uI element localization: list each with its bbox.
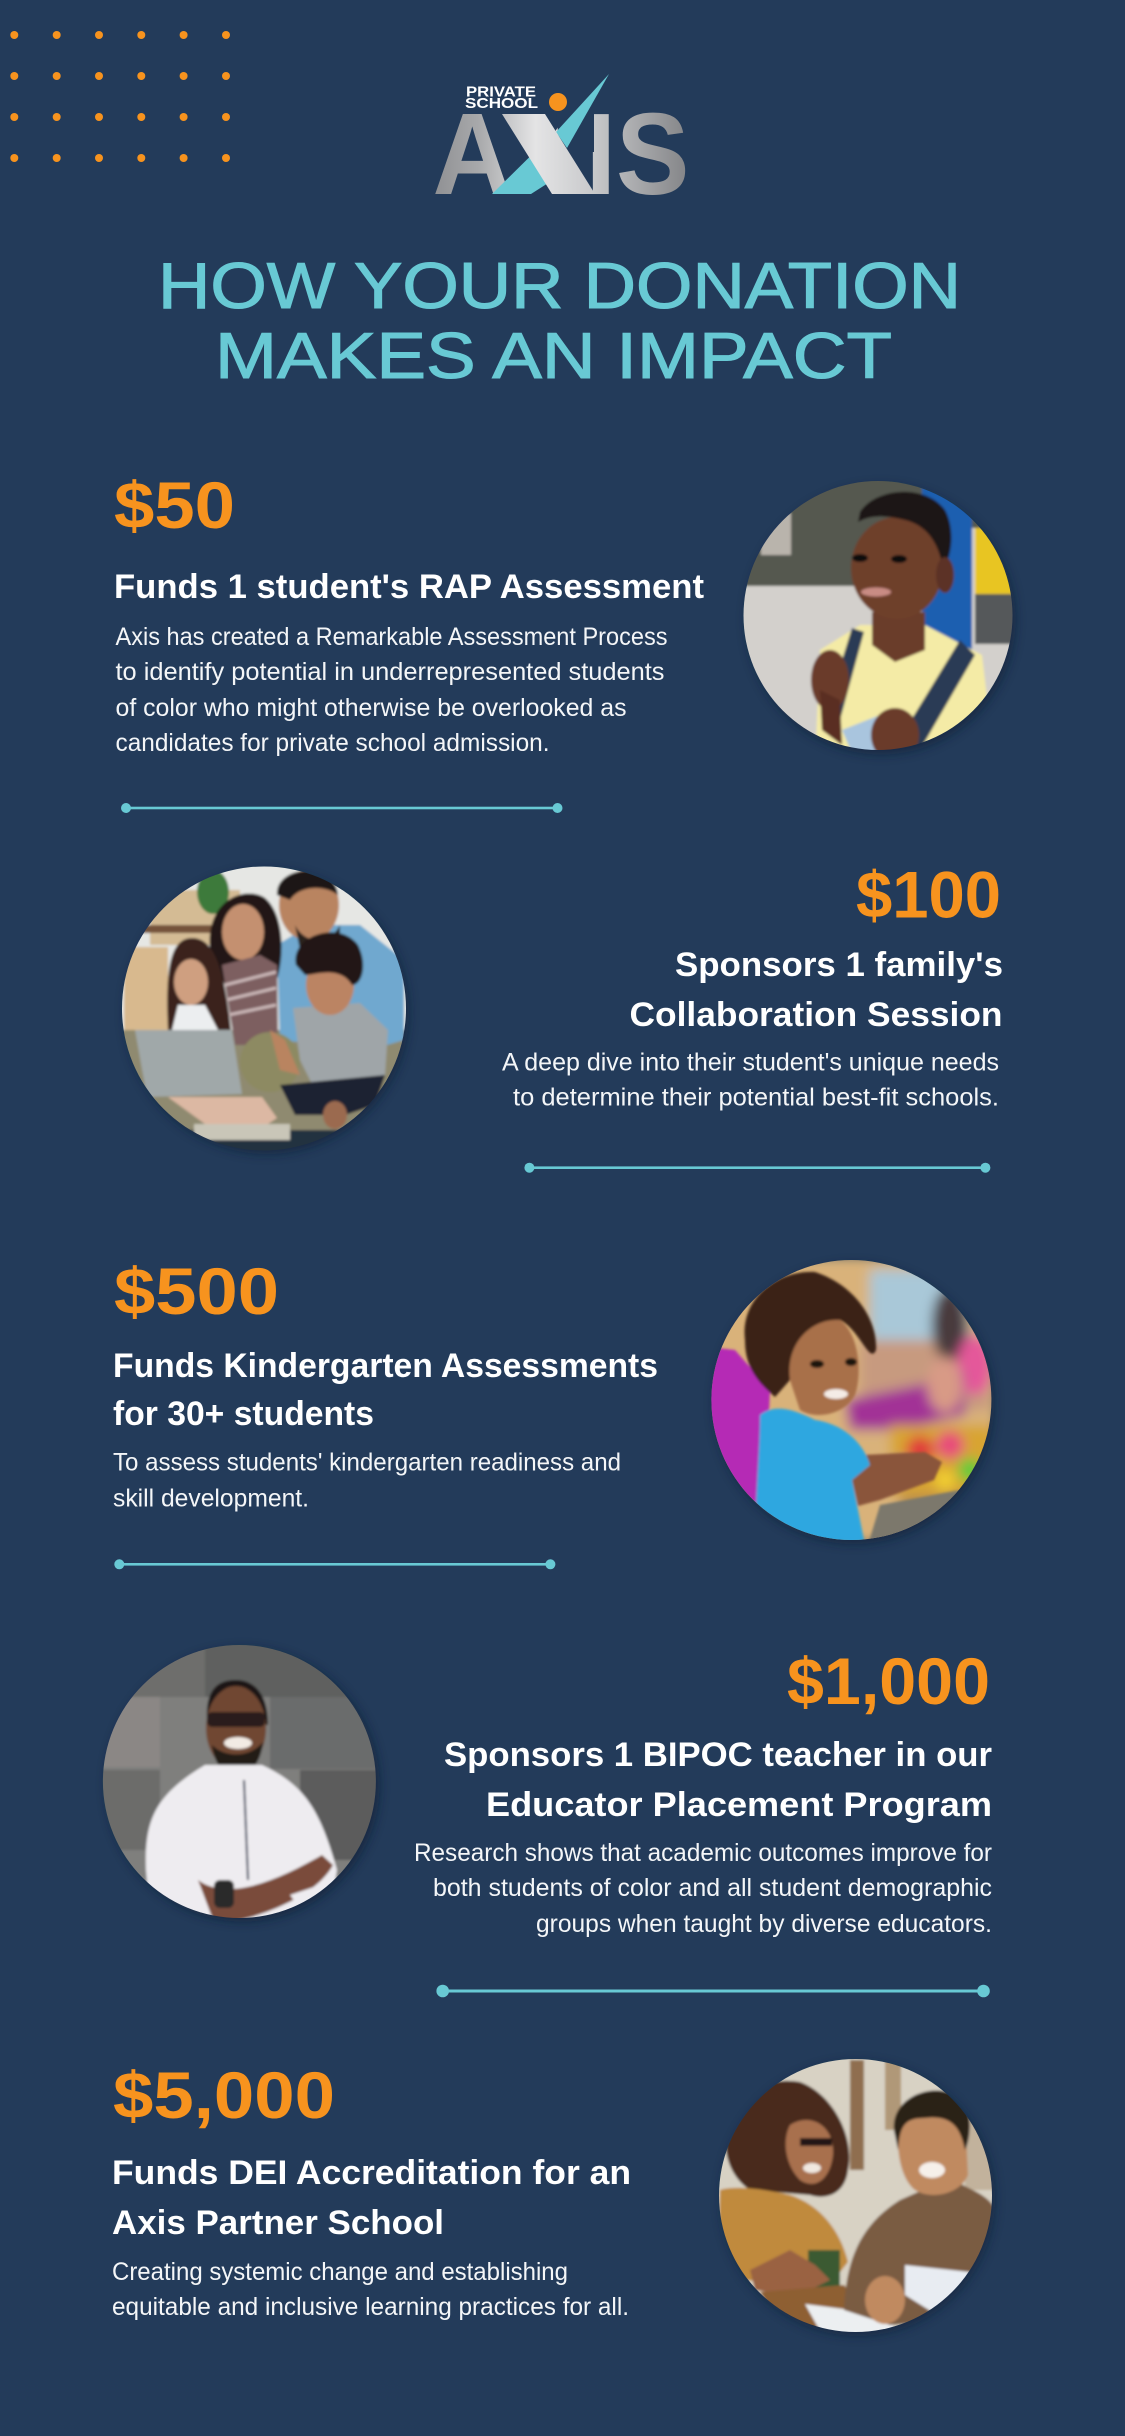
- heading: collaboration session: [630, 946, 1003, 1034]
- heading: kindergarten assessments: for 30+ students: [113, 1395, 374, 1433]
- amount: $100: $100: [856, 858, 1001, 932]
- divider 1: [121, 803, 562, 813]
- heading: educator placement: Sponsors 1 BIPOC teacher in our: [444, 1736, 992, 1774]
- body text: RAP assessment: [116, 623, 668, 757]
- body text: collaboration session: to determine their potential best-fit schools.: [513, 1084, 999, 1112]
- photo: family with laptop: [118, 862, 410, 1160]
- heading: DEI accreditation: Funds DEI Accreditation for an: [112, 2154, 631, 2192]
- body text: RAP assessment: Axis has created a Remarkable Assessment Process: [116, 623, 668, 651]
- body text: kindergarten assessments: skill development.: [113, 1485, 309, 1513]
- body text: kindergarten assessments: To assess students' kindergarten readiness and: [113, 1449, 621, 1477]
- heading: kindergarten assessments: [113, 1347, 658, 1433]
- panel: $1,000 educator placement: [100, 1642, 992, 1938]
- amount: $1,000: $1,000: [787, 1644, 990, 1718]
- photo: girl with backpack: [740, 478, 1020, 762]
- photo: teacher with crossed arms: [100, 1642, 380, 1925]
- photo: couple reviewing paperwork: [715, 2055, 995, 2340]
- body text: educator placement: Research shows that academic outcomes improve for: [414, 1839, 992, 1867]
- body text: collaboration session: A deep dive into their student's unique needs: [502, 1049, 999, 1077]
- photo: smiling child with toys: [708, 1256, 998, 1545]
- title: HOW YOUR DONATION: [158, 249, 961, 322]
- heading: collaboration session: Sponsors 1 family's: [675, 946, 1003, 984]
- panel: $50 RAP assessment: [114, 468, 1020, 762]
- heading: kindergarten assessments: Funds Kindergarten Assessments: [113, 1347, 658, 1385]
- title: [158, 249, 961, 392]
- body text: RAP assessment: candidates for private school admission.: [116, 729, 550, 757]
- amount: $500: $500: [114, 1254, 279, 1328]
- heading: DEI accreditation: Axis Partner School: [112, 2204, 444, 2242]
- title: MAKES AN IMPACT: [215, 319, 892, 392]
- divider 4: [436, 1985, 990, 1997]
- panel: $500 kindergarten assessments: [113, 1254, 998, 1545]
- body text: RAP assessment: of color who might otherwise be overlooked as: [116, 694, 626, 722]
- body text: educator placement: [414, 1839, 992, 1938]
- amount: $50: $50: [114, 468, 235, 542]
- logo: Private School Axis: SCHOOL: [465, 95, 538, 112]
- heading: educator placement: Educator Placement Program: [486, 1786, 992, 1824]
- amount: $5,000: $5,000: [113, 2058, 335, 2132]
- heading: educator placement: [444, 1736, 992, 1824]
- panel: $100 collaboration session: [118, 858, 1003, 1160]
- logo: Private School Axis: AXIS: [432, 89, 690, 219]
- body text: DEI accreditation: [112, 2258, 629, 2321]
- heading: DEI accreditation: [112, 2154, 631, 2242]
- body text: educator placement: groups when taught by diverse educators.: [536, 1910, 992, 1938]
- heading: RAP assessment: Funds 1 student's RAP Assessment: [114, 568, 704, 606]
- body text: kindergarten assessments: [113, 1449, 621, 1513]
- body text: DEI accreditation: equitable and inclusive learning practices for all.: [112, 2293, 629, 2321]
- divider 3: [114, 1559, 555, 1569]
- body text: collaboration session: [502, 1049, 999, 1112]
- divider 2: [524, 1163, 990, 1173]
- body text: DEI accreditation: Creating systemic change and establishing: [112, 2258, 568, 2286]
- logo: Private School Axis: PRIVATE: [466, 84, 536, 100]
- panel: $5,000 DEI accreditation: [112, 2055, 995, 2340]
- body text: RAP assessment: to identify potential in underrepresented students: [116, 658, 664, 686]
- body text: educator placement: both students of color and all student demographic: [433, 1874, 992, 1902]
- heading: collaboration session: Collaboration Session: [630, 996, 1002, 1034]
- decorative orange dot grid: [10, 31, 230, 162]
